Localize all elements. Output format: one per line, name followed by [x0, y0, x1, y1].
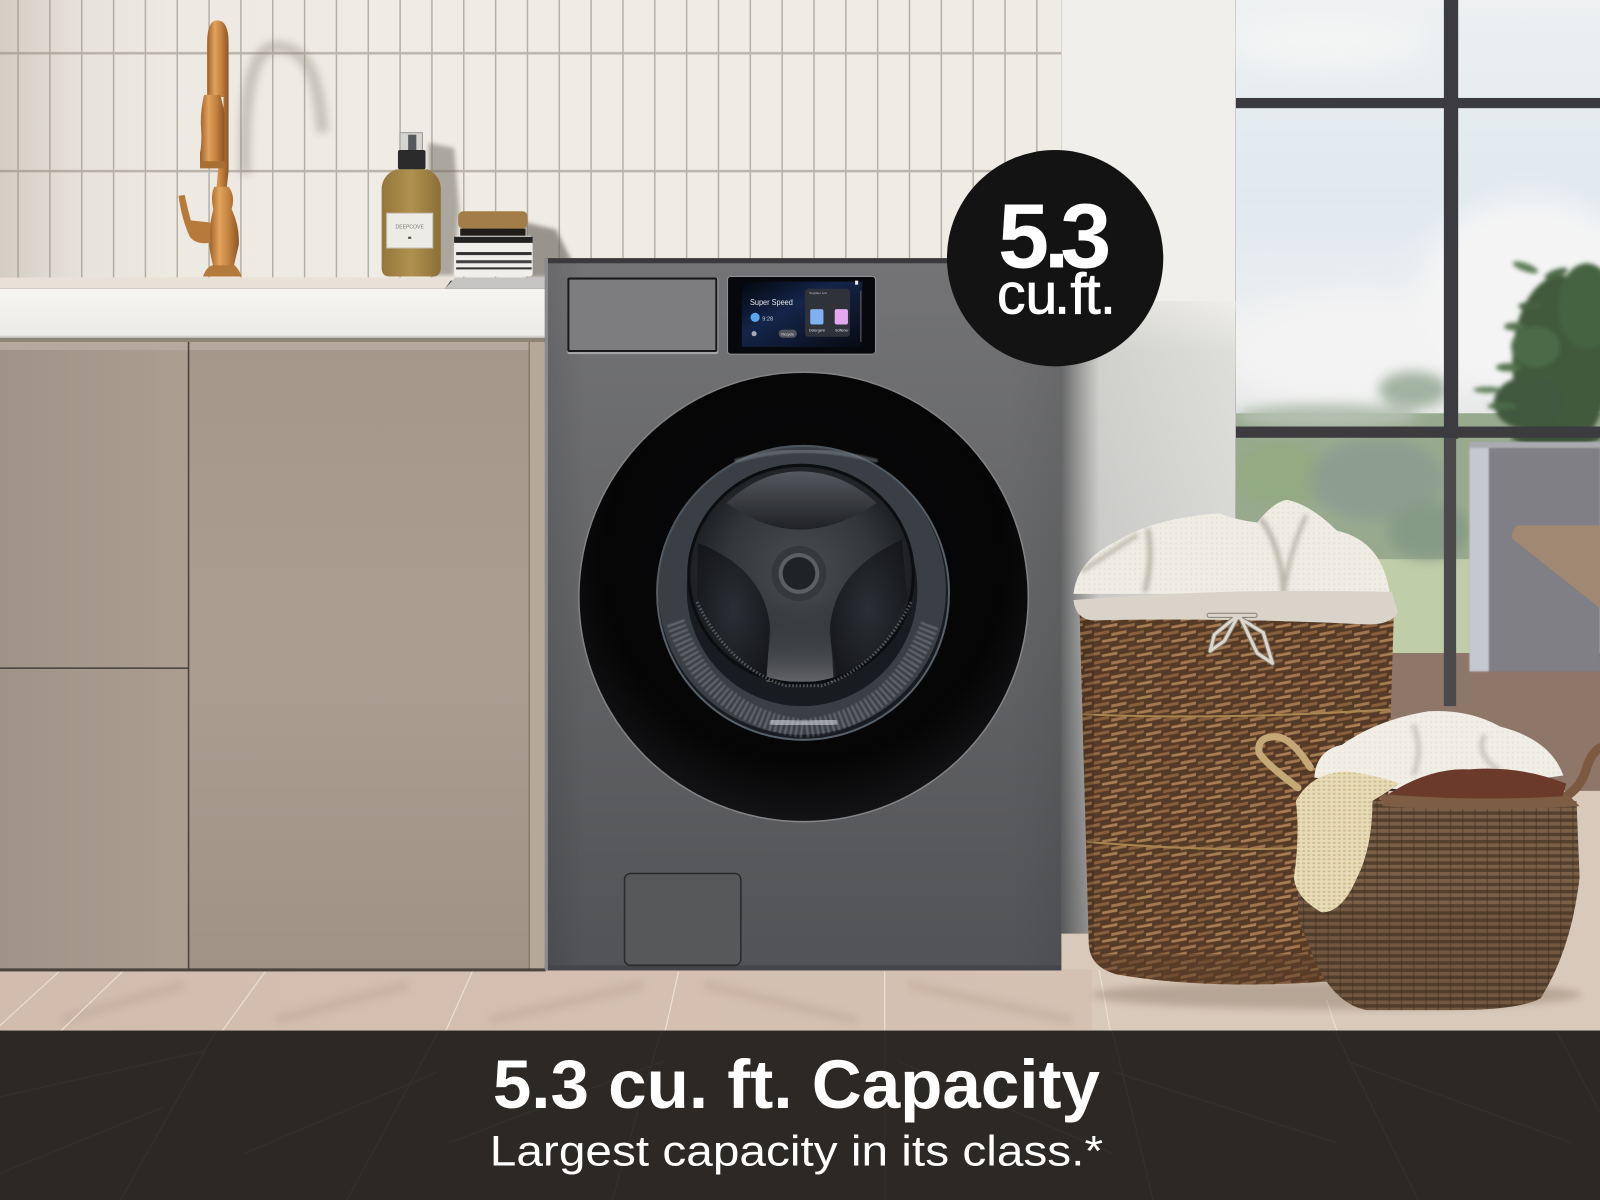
soap bottle shadow — [429, 143, 459, 276]
tile shading at far left — [0, 0, 429, 281]
title: 5.3 cu. ft. Capacity — [493, 1047, 1100, 1123]
touch display: Super Speed — [750, 297, 793, 307]
soap bottle — [382, 133, 441, 277]
cabinets — [0, 342, 546, 971]
concrete planter — [1469, 442, 1600, 671]
parquet pattern in band — [0, 1031, 1600, 1200]
capacity badge — [947, 150, 1163, 366]
drum — [689, 465, 913, 686]
touch display: 9:28 — [762, 316, 773, 322]
window frame — [1236, 0, 1600, 706]
right handle — [1563, 748, 1600, 798]
touch display: Recycle — [781, 333, 794, 337]
touch display: Supplies Left — [809, 291, 827, 295]
wall shadow — [1061, 301, 1236, 944]
basket rim — [1380, 794, 1580, 809]
jar shadow — [526, 222, 571, 278]
large wicker hamper — [1071, 500, 1398, 990]
left handle — [1259, 737, 1310, 788]
parquet floor — [0, 969, 1337, 1031]
small rattan basket — [1259, 711, 1600, 1015]
cream knit throw — [1294, 771, 1400, 912]
white towels — [1073, 500, 1390, 596]
filter door — [624, 873, 741, 965]
fabric liner — [1073, 591, 1398, 624]
brown blanket — [1386, 769, 1566, 801]
hamper weave — [1071, 612, 1398, 990]
rear floor — [1236, 653, 1600, 806]
touch display — [728, 277, 876, 354]
basket floor shadow — [1092, 981, 1582, 1009]
potted plant — [1473, 259, 1600, 449]
wall tiles — [0, 0, 1061, 281]
subtitle: Largest capacity in its class.* — [490, 1127, 1103, 1175]
touch display: Detergent — [809, 329, 825, 333]
window view — [1224, 0, 1600, 671]
wooden bench — [1512, 526, 1600, 608]
drum hub — [771, 546, 827, 601]
soap bottle: DEEPCOVE — [396, 225, 424, 231]
faucet — [179, 20, 242, 277]
caption band — [0, 1031, 1600, 1200]
plain wall — [1061, 0, 1236, 311]
door — [578, 371, 1029, 822]
door glass — [657, 446, 949, 740]
white towels in basket — [1314, 711, 1563, 794]
washing machine — [545, 258, 1061, 970]
washer body — [545, 258, 1061, 970]
foreground floor — [0, 791, 1600, 1031]
basket weave — [1296, 791, 1587, 1015]
countertop — [0, 278, 545, 342]
touch display: Softener — [835, 329, 849, 333]
jar with wooden lid — [454, 211, 533, 277]
faucet shadow — [245, 47, 322, 173]
badge number: 5.3 — [998, 185, 1111, 287]
liner tie — [1209, 615, 1272, 663]
detergent drawer — [567, 278, 718, 354]
badge unit: cu.ft. — [997, 262, 1116, 326]
